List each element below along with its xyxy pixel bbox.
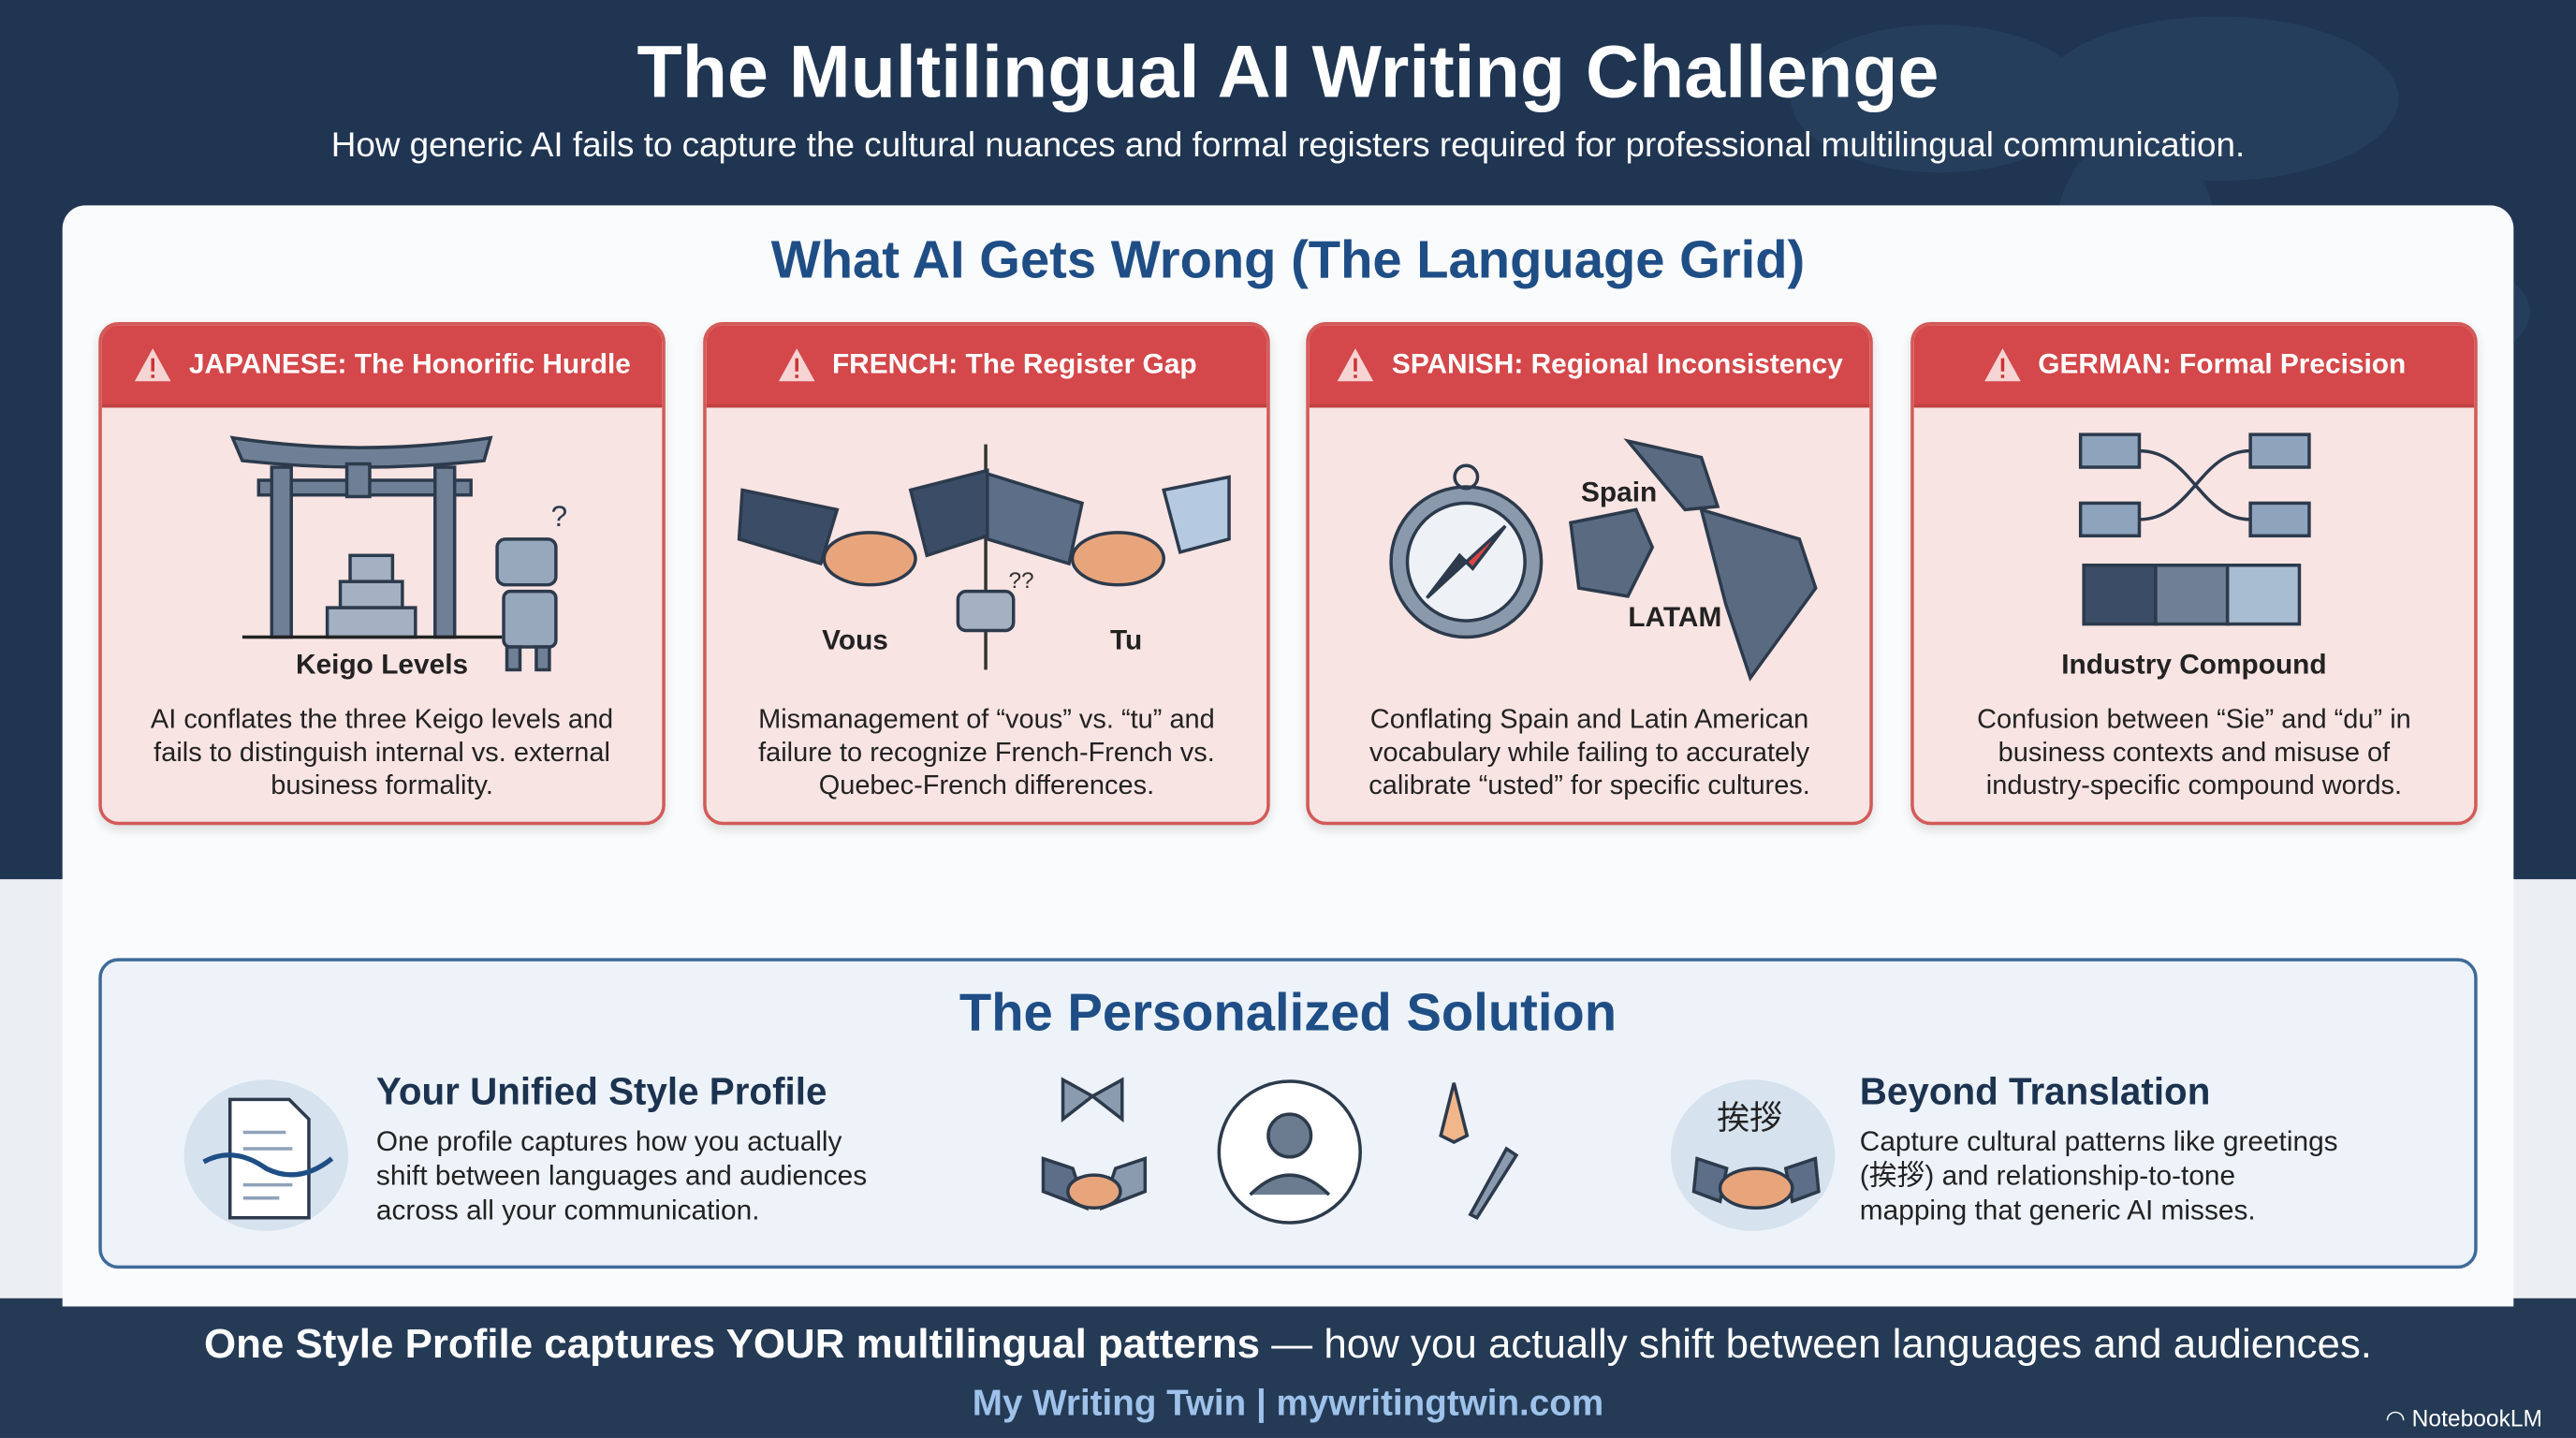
section heading: What AI Gets Wrong (The Language Grid) — [771, 230, 1805, 289]
card: japanese: JAPANESE: The Honorific Hurdle — [189, 348, 631, 379]
icon: torii gate and robot: ? — [551, 500, 567, 533]
icon: flow boxes and puzzle — [2078, 433, 2311, 625]
card: german: Confusion between “Sie” and “du” in business contexts and misuse of industry-specific compound words. — [1977, 705, 2411, 800]
icon: handshakes vous/tu: ?? — [1008, 568, 1034, 594]
icon: compass and map — [1389, 438, 1818, 682]
card: french — [703, 322, 1270, 825]
card: spanish: Spain — [1581, 477, 1657, 507]
card: german: GERMAN: Formal Precision — [2038, 348, 2406, 379]
text: unified style profile — [376, 1070, 867, 1226]
card: spanish: SPANISH: Regional Inconsistency — [1392, 348, 1843, 379]
icons: cultural symbols — [1041, 1077, 1518, 1225]
main panel — [63, 205, 2513, 1307]
text: unified style profile: across all your communication. — [376, 1195, 760, 1226]
text: unified style profile: One profile captures how you actually — [376, 1125, 842, 1157]
subtitle: How generic AI fails to capture the cultural nuances and formal registers required for professional multilingual communication. — [331, 126, 2245, 165]
card: german: Industry Compound — [2061, 649, 2327, 681]
notebooklm badge: ◠ NotebookLM — [2385, 1405, 2542, 1431]
card: spanish: LATAM — [1628, 601, 1721, 633]
card: french: Mismanagement of “vous” vs. “tu” and failure to recognize French-French vs. Quebec-French differences. — [758, 705, 1215, 800]
header background — [0, 0, 2576, 879]
card: japanese: AI conflates the three Keigo levels and fails to distinguish internal vs. external business formality. — [151, 705, 613, 800]
card: german — [1910, 322, 2478, 825]
icon: torii gate and robot — [230, 435, 567, 672]
card: french: FRENCH: The Register Gap — [832, 348, 1197, 379]
world map decoration — [1792, 17, 2529, 341]
footer link: My Writing Twin | mywritingtwin.com — [973, 1382, 1603, 1423]
text: beyond translation: Capture cultural patterns like greetings — [1860, 1125, 2338, 1157]
solution heading: The Personalized Solution — [959, 983, 1617, 1042]
text: unified style profile: shift between languages and audiences — [376, 1160, 867, 1192]
text: beyond translation: (挨拶) and relationship-to-tone — [1860, 1160, 2235, 1192]
text: beyond translation — [1860, 1070, 2338, 1226]
icon: aisatsu handshake: 挨拶 — [1717, 1092, 1782, 1139]
card: japanese — [98, 322, 666, 825]
footer background — [0, 1299, 2576, 1438]
panel: personalized solution — [98, 958, 2478, 1269]
card: spanish — [1306, 322, 1873, 825]
text: beyond translation: mapping that generic AI misses. — [1860, 1195, 2256, 1226]
card: french: Vous — [822, 624, 888, 655]
card: spanish: Conflating Spain and Latin American vocabulary while failing to accurately calibrate “usted” for specific cultures. — [1368, 705, 1810, 800]
icon: document — [183, 1079, 348, 1231]
text: unified style profile: Your Unified Style Profile — [376, 1070, 827, 1112]
text: beyond translation: Beyond Translation — [1860, 1070, 2210, 1112]
card: french: Tu — [1110, 624, 1142, 655]
title: The Multilingual AI Writing Challenge — [637, 30, 1939, 113]
card: japanese: Keigo Levels — [296, 649, 468, 681]
icon: aisatsu handshake — [1671, 1079, 1835, 1231]
icon: handshakes vous/tu — [738, 444, 1231, 670]
footer tagline: One Style Profile captures YOUR multilingual patterns — how you actually shift between languages and audiences. — [204, 1321, 2372, 1367]
